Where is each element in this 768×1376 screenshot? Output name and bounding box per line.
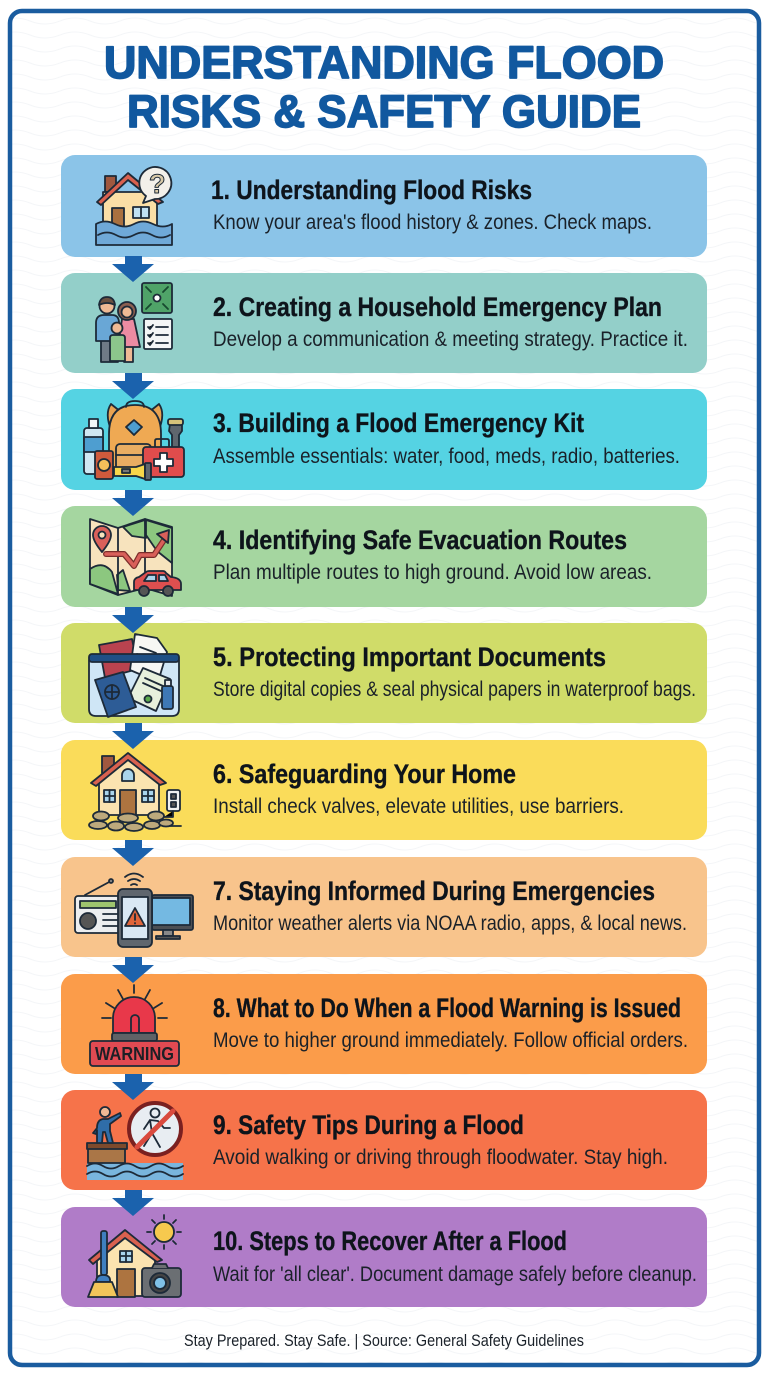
icon: protected home [89, 753, 181, 831]
arrow: step 1 to 2 [112, 256, 154, 282]
panel: step 4 [61, 506, 707, 607]
description: Know your area's flood history & zones. Check maps. [213, 211, 652, 234]
description: Wait for 'all clear'. Document damage safely before cleanup. [213, 1263, 697, 1286]
heading: 9. Safety Tips During a Flood [213, 1110, 524, 1140]
description: Monitor weather alerts via NOAA radio, apps, & local news. [213, 912, 687, 935]
description: Develop a communication & meeting strategy. Practice it. [213, 328, 688, 351]
title: RISKS & SAFETY GUIDE [127, 86, 641, 137]
arrow: step 3 to 4 [112, 490, 154, 516]
arrow: step 7 to 8 [112, 957, 154, 983]
heading: 10. Steps to Recover After a Flood [213, 1226, 567, 1256]
description: Assemble essentials: water, food, meds, radio, batteries. [213, 445, 680, 468]
heading: 6. Safeguarding Your Home [213, 759, 516, 789]
panel: step 2 [61, 273, 707, 373]
panel: step 1 [61, 155, 707, 257]
panel: step 3 [61, 389, 707, 490]
heading: 7. Staying Informed During Emergencies [213, 876, 655, 906]
heading: 5. Protecting Important Documents [213, 642, 606, 672]
icon: warning beacon [90, 985, 179, 1066]
icon: warning beacon: WARNING [95, 1044, 174, 1064]
panel: step 5 [61, 623, 707, 723]
icon: map and car [90, 519, 181, 596]
arrow: step 9 to 10 [112, 1190, 154, 1216]
arrow: step 2 to 3 [112, 373, 154, 399]
icon: no walking through floodwater [87, 1103, 183, 1180]
panel: step 10 [61, 1207, 707, 1307]
description: Move to higher ground immediately. Follow official orders. [213, 1029, 688, 1052]
title: UNDERSTANDING FLOOD [104, 37, 664, 88]
icon: house, broom, sun and camera [88, 1215, 181, 1297]
arrow: step 4 to 5 [112, 607, 154, 633]
title [104, 37, 664, 137]
arrow: step 8 to 9 [112, 1074, 154, 1100]
panel: step 8 [61, 974, 707, 1074]
panel: step 6 [61, 740, 707, 840]
description: Install check valves, elevate utilities, use barriers. [213, 795, 624, 818]
arrow: step 5 to 6 [112, 723, 154, 749]
heading: 2. Creating a Household Emergency Plan [213, 292, 662, 322]
icon: flooded house: ? [149, 169, 166, 199]
icon: flooded house [96, 167, 172, 245]
icon: waterproof bag of documents [89, 634, 179, 717]
arrow: step 6 to 7 [112, 840, 154, 866]
icon: radio, phone and monitor [75, 874, 193, 947]
heading: 4. Identifying Safe Evacuation Routes [213, 525, 627, 555]
footer: Stay Prepared. Stay Safe. | Source: General Safety Guidelines [184, 1332, 584, 1350]
panel: step 9 [61, 1090, 707, 1190]
description: Avoid walking or driving through floodwater. Stay high. [213, 1146, 668, 1169]
icon: emergency kit [84, 401, 184, 480]
icon: family with plan [96, 283, 172, 362]
heading: 3. Building a Flood Emergency Kit [213, 408, 584, 438]
panel: step 7 [61, 857, 707, 957]
heading: 1. Understanding Flood Risks [211, 175, 532, 205]
description: Plan multiple routes to high ground. Avoid low areas. [213, 561, 652, 584]
